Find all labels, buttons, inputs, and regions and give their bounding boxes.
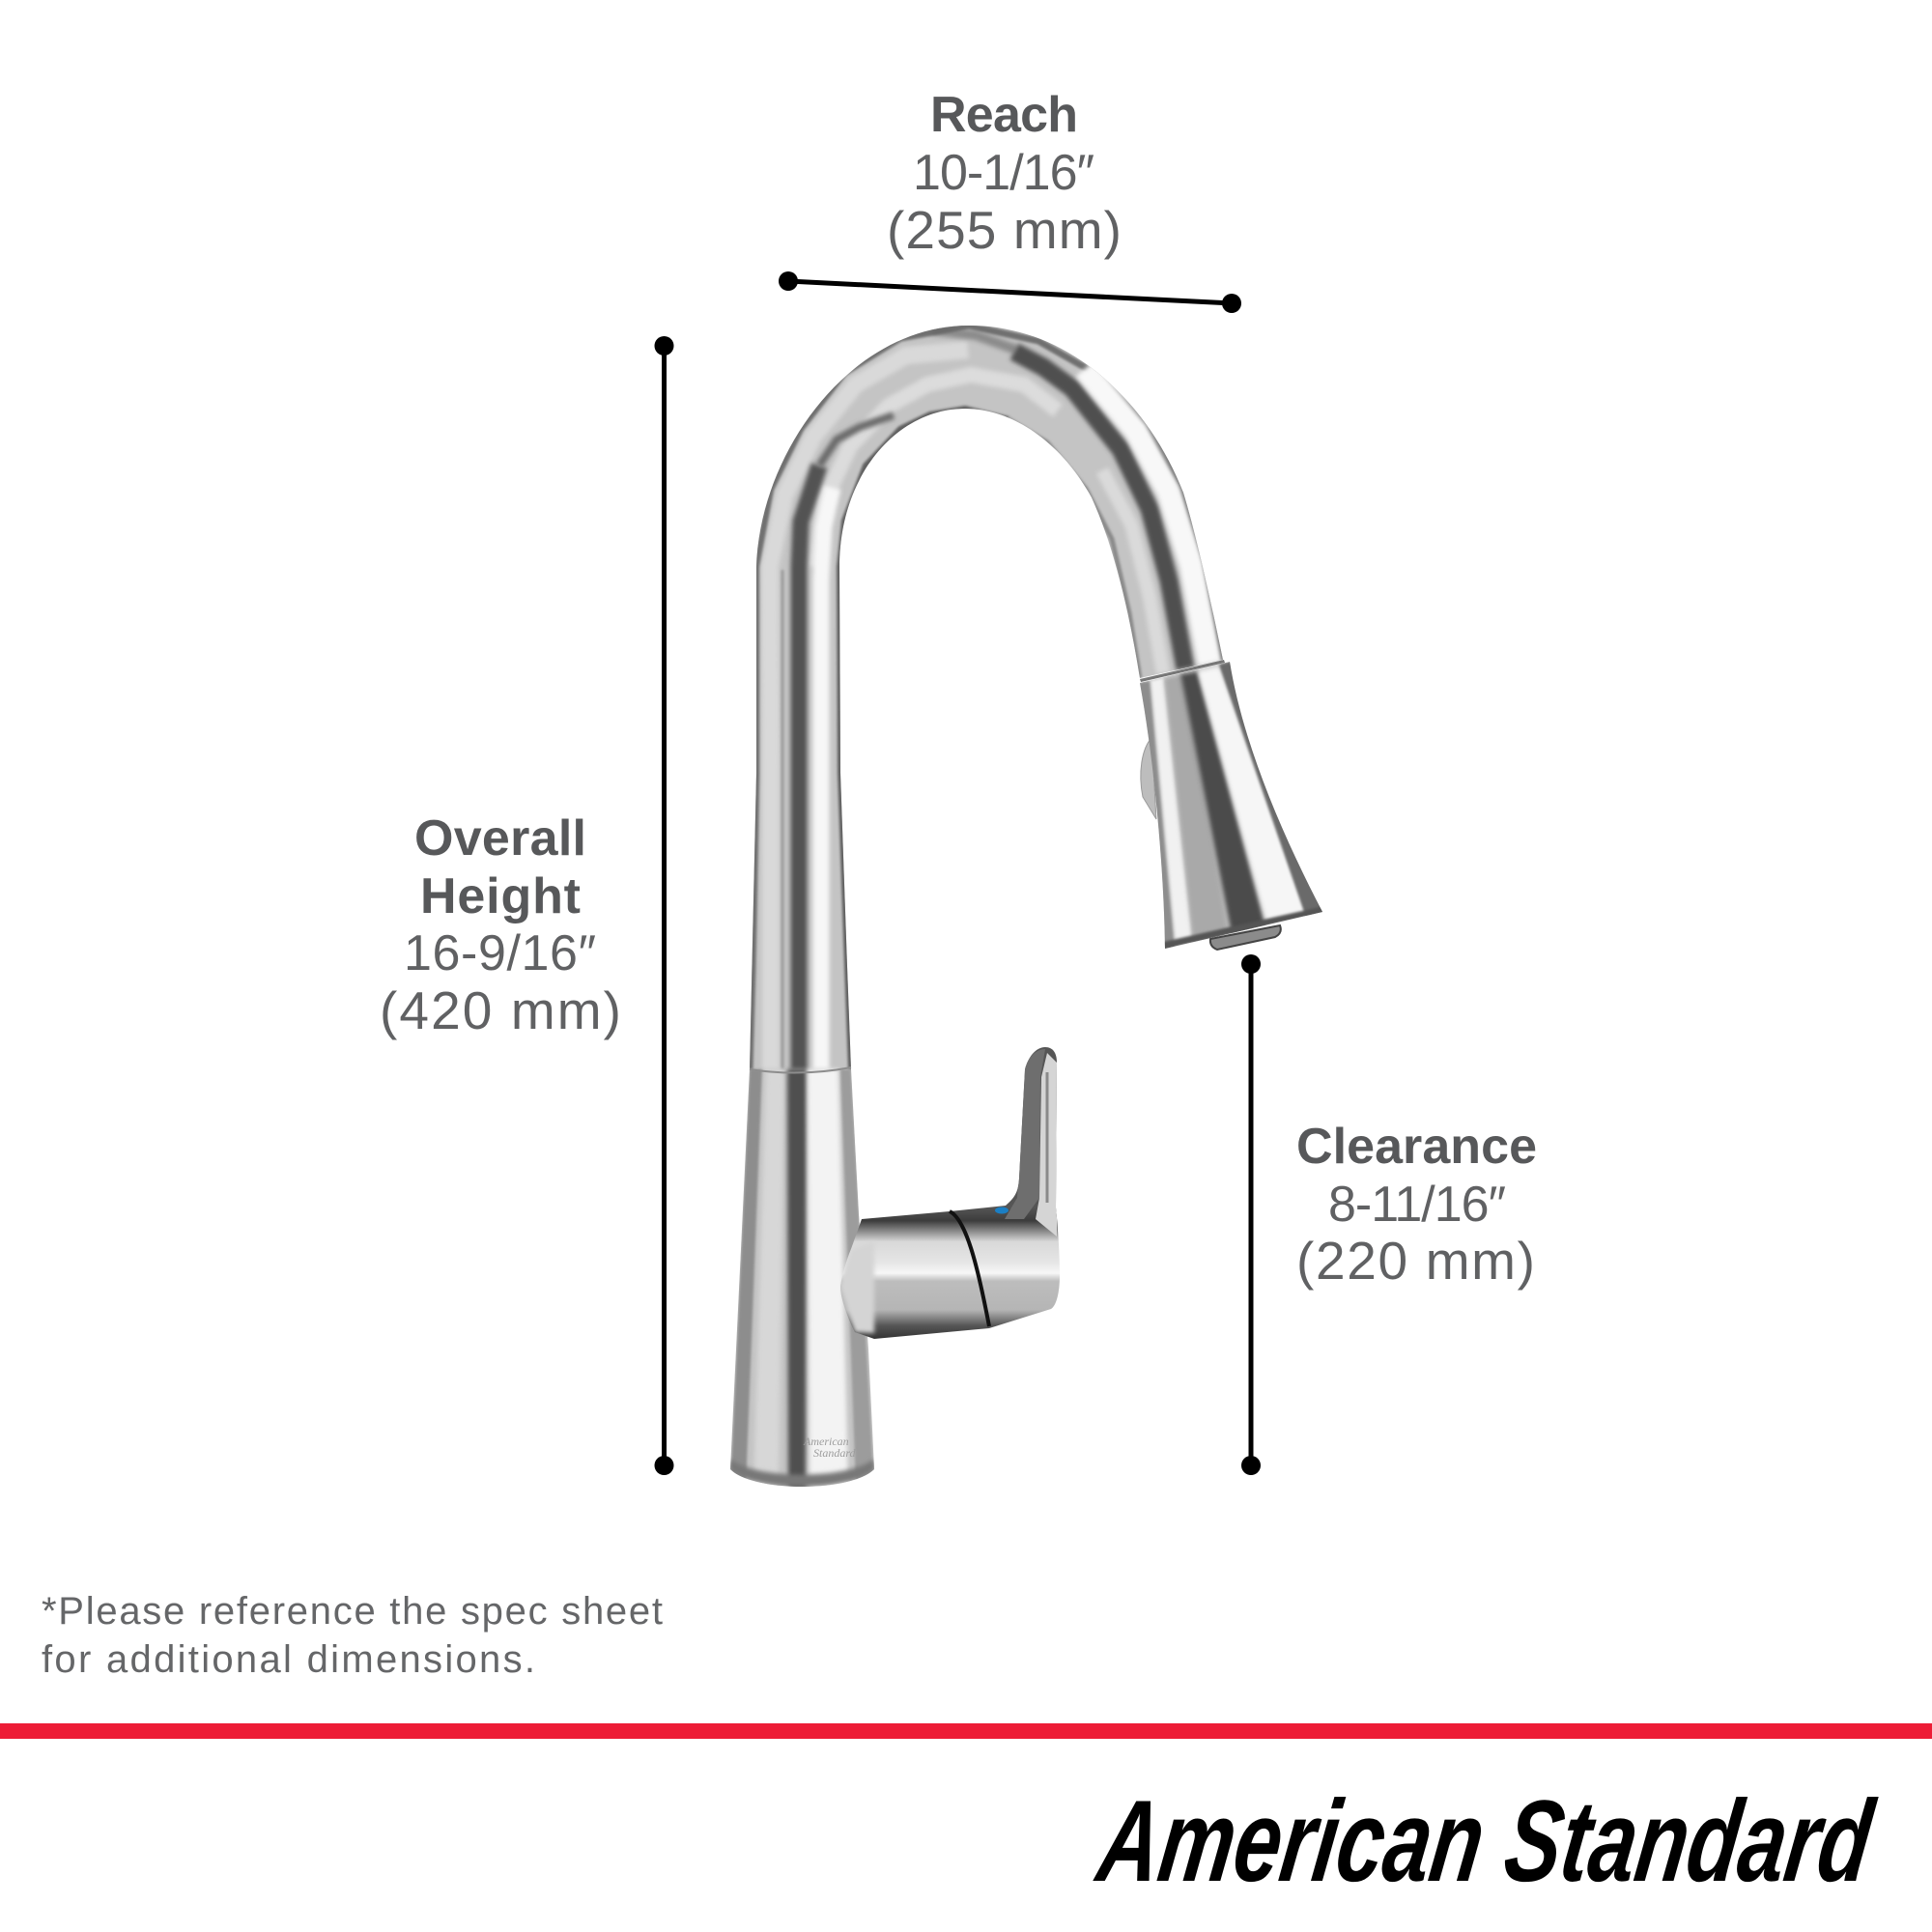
inner edge shading xyxy=(839,409,1009,1069)
upper neck dark band xyxy=(799,466,819,1069)
lever dark face xyxy=(1005,1049,1045,1219)
clearance label: Clearance xyxy=(1296,1119,1537,1175)
base logo xyxy=(803,1435,857,1460)
base logo: American xyxy=(803,1435,849,1448)
upper neck white band xyxy=(821,488,833,1069)
right side white band xyxy=(1085,369,1209,664)
faucet xyxy=(730,326,1328,1488)
clearance dimension line xyxy=(1241,954,1261,1475)
body nose highlight xyxy=(840,1241,874,1333)
base logo: Standard xyxy=(813,1446,857,1460)
head collar ring xyxy=(1140,660,1225,682)
overall height label: Overall xyxy=(414,810,586,867)
reach label: (255 mm) xyxy=(887,200,1122,260)
overall height label xyxy=(380,810,621,1040)
spray button xyxy=(1141,738,1156,819)
handle xyxy=(840,1047,1060,1339)
clearance label: 8-11/16″ xyxy=(1328,1177,1506,1233)
footnote: *Please reference the spec sheet xyxy=(42,1590,663,1633)
right side dark band xyxy=(1014,352,1185,668)
overall height dimension line xyxy=(655,336,674,1475)
reach label: 10-1/16″ xyxy=(913,145,1094,201)
base shadow xyxy=(730,1459,874,1487)
upper neck dark band taper xyxy=(819,415,894,466)
indicator blue dot xyxy=(995,1208,1009,1213)
reach label xyxy=(887,87,1122,260)
overall height label: 16-9/16″ xyxy=(404,925,596,981)
overall height label: Height xyxy=(420,868,581,924)
clearance label xyxy=(1296,1119,1537,1291)
lever light face xyxy=(1036,1053,1057,1236)
handle groove xyxy=(950,1211,989,1326)
lever inner fold xyxy=(1045,1072,1049,1203)
top dark band start xyxy=(932,330,1016,350)
overall height label: (420 mm) xyxy=(380,980,621,1040)
red divider bar xyxy=(0,1723,1932,1739)
footnote xyxy=(42,1590,663,1681)
collar seam xyxy=(750,1067,851,1073)
left thin gray line xyxy=(781,570,784,1069)
lower body bands xyxy=(730,1069,762,1488)
left outer highlight xyxy=(770,350,968,1069)
reach label: Reach xyxy=(930,87,1078,143)
reach dimension line xyxy=(779,271,1241,313)
spray head xyxy=(1135,660,1328,951)
clearance label: (220 mm) xyxy=(1296,1231,1535,1291)
spout and body xyxy=(730,326,1223,1488)
inner top highlight xyxy=(816,375,1058,567)
outer edge shading xyxy=(750,326,1223,1069)
inner right light band xyxy=(1102,470,1163,673)
footnote: for additional dimensions. xyxy=(42,1638,535,1681)
